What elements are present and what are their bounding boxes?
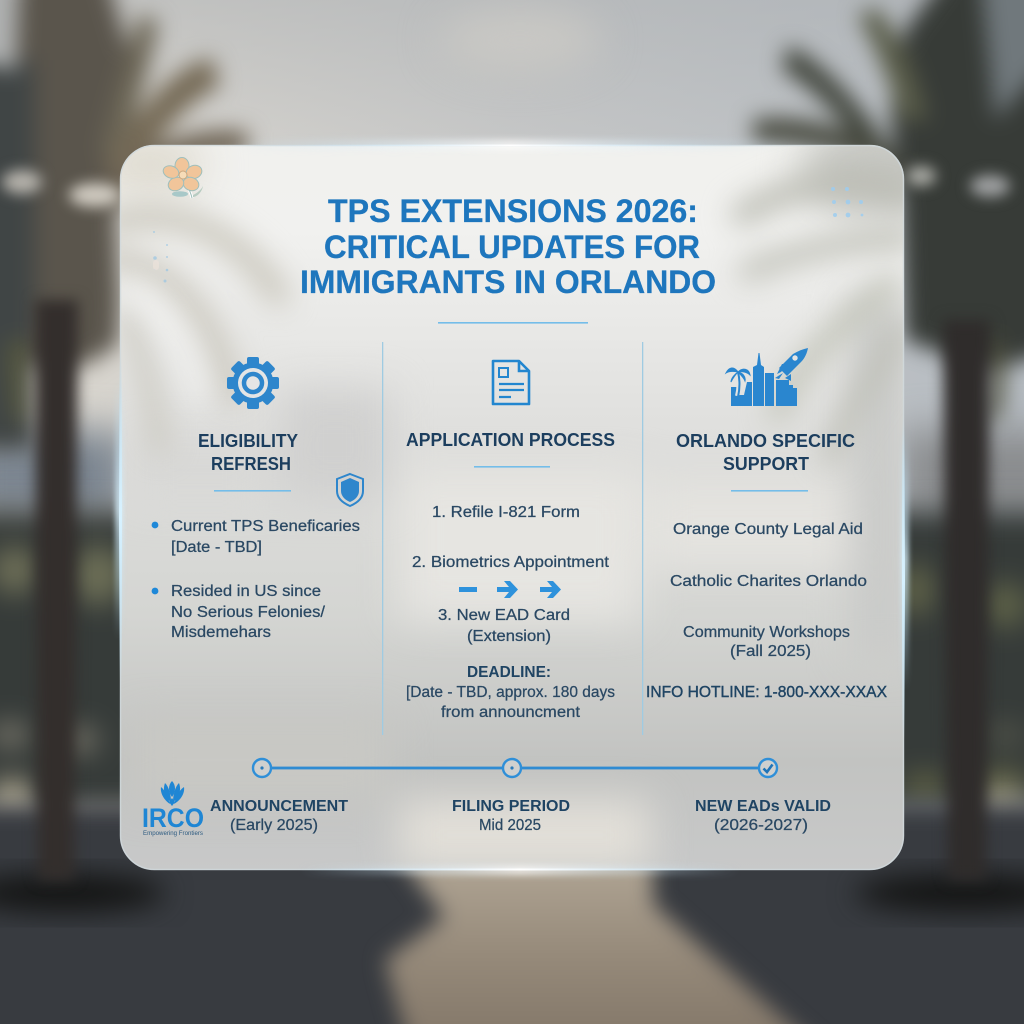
icon: shield bbox=[337, 474, 363, 506]
logo: IRCO: Empowering Frontiers bbox=[143, 830, 204, 837]
label: filing period: Mid 2025 bbox=[479, 817, 541, 834]
heading: orlando specific support: ORLANDO SPECIFIC bbox=[676, 431, 855, 451]
column: orlando specific support bbox=[646, 348, 888, 701]
node: announcement bbox=[253, 759, 271, 777]
decorative dots: right bbox=[831, 187, 863, 217]
bullet list: Current TPS Beneficaries bbox=[171, 518, 360, 535]
title: IMMIGRANTS IN ORLANDO bbox=[300, 264, 716, 300]
deadline bbox=[406, 664, 615, 721]
bullet list: Misdemehars bbox=[171, 624, 271, 641]
timeline bbox=[210, 759, 831, 834]
deadline: from announcment bbox=[441, 704, 581, 721]
title: CRITICAL UPDATES FOR bbox=[324, 229, 700, 265]
column: eligibility refresh bbox=[152, 357, 363, 641]
left palm bbox=[0, 0, 248, 880]
step 2: 2. Biometrics Appointment bbox=[412, 554, 610, 571]
decorative faint dots: left bbox=[153, 231, 168, 282]
support item 3: Community Workshops bbox=[683, 624, 850, 641]
step 3: (Extension) bbox=[467, 628, 551, 645]
deadline: DEADLINE: bbox=[467, 664, 551, 681]
icon: flower bbox=[161, 158, 204, 198]
label: new EADs valid bbox=[695, 798, 831, 834]
lower dark foliage band bbox=[0, 510, 1024, 819]
right palm bbox=[752, 0, 1024, 880]
logo: IRCO: IRCO bbox=[142, 803, 204, 833]
support item 3: (Fall 2025) bbox=[730, 643, 811, 660]
support item 1: Orange County Legal Aid bbox=[673, 521, 863, 538]
label: announcement: (Early 2025) bbox=[230, 817, 318, 834]
column divider left bbox=[382, 342, 383, 735]
bullet list: [Date - TBD] bbox=[171, 539, 262, 556]
column divider right bbox=[642, 342, 643, 735]
node: filing period bbox=[503, 759, 521, 777]
bullet list bbox=[152, 518, 360, 641]
label: announcement: ANNOUNCEMENT bbox=[210, 798, 348, 815]
label: new EADs valid: (2026-2027) bbox=[714, 817, 808, 834]
node: new EADs valid bbox=[759, 759, 777, 777]
title: TPS EXTENSIONS 2026: bbox=[328, 193, 698, 229]
icon: city with palm and rocket bbox=[726, 348, 808, 406]
label: filing period bbox=[452, 798, 570, 834]
support item 2: Catholic Charites Orlando bbox=[670, 573, 867, 590]
label: filing period: FILING PERIOD bbox=[452, 798, 570, 815]
support item 3 bbox=[683, 624, 850, 660]
step 3: 3. New EAD Card bbox=[438, 607, 570, 624]
arrows bbox=[459, 581, 561, 598]
title bbox=[300, 193, 716, 300]
bullet list: Resided in US since bbox=[171, 583, 321, 600]
step 1: 1. Refile I-821 Form bbox=[432, 504, 580, 521]
heading: orlando specific support: SUPPORT bbox=[723, 454, 809, 474]
heading: eligibility refresh: REFRESH bbox=[211, 454, 291, 474]
heading: eligibility refresh bbox=[198, 431, 298, 474]
step 3 bbox=[438, 607, 570, 645]
glass panel bbox=[95, 120, 960, 874]
column: application process bbox=[406, 361, 615, 721]
label: new EADs valid: NEW EADs VALID bbox=[695, 798, 831, 815]
label: announcement bbox=[210, 798, 348, 834]
deadline: [Date - TBD, approx. 180 days bbox=[406, 684, 615, 701]
ground bbox=[0, 805, 1024, 1024]
icon: document bbox=[493, 361, 529, 404]
bullet list: No Serious Felonies/ bbox=[171, 604, 326, 621]
logo: IRCO bbox=[142, 781, 204, 837]
heading: orlando specific support bbox=[676, 431, 855, 474]
icon: gear bbox=[227, 357, 279, 409]
heading: application process: APPLICATION PROCESS bbox=[406, 430, 615, 450]
hotline: INFO HOTLINE: 1-800-XXX-XXAX bbox=[646, 684, 888, 701]
heading: eligibility refresh: ELIGIBILITY bbox=[198, 431, 298, 451]
